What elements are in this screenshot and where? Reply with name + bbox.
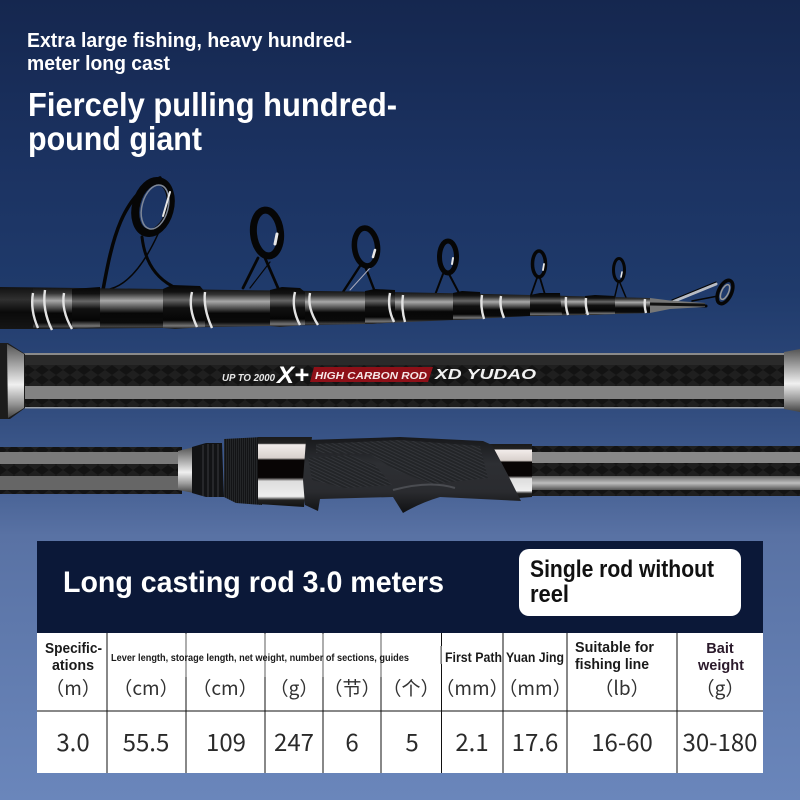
table units: （cm）: [113, 674, 179, 701]
guide rings and frames: [103, 177, 736, 306]
left blank: [0, 447, 182, 494]
panel title: Long casting rod 3.0 meters: [63, 566, 444, 599]
knurled ring: [224, 437, 262, 505]
table units: （个）: [382, 674, 440, 701]
table headers: [45, 640, 744, 674]
title: headline: Fiercely pulling hundred-: [28, 86, 397, 123]
table values: 6: [345, 723, 359, 758]
note badge: [519, 549, 741, 616]
table headers: Bait: [706, 641, 734, 657]
table units: （lb）: [594, 674, 650, 701]
chrome reel seat: [258, 437, 312, 507]
table values: 55.5: [123, 723, 169, 758]
table values: 30-180: [683, 723, 757, 758]
silver ferrule: [178, 447, 194, 493]
rod sections: [0, 287, 33, 329]
logo: X mark: X+: [275, 362, 309, 389]
table units: （g）: [270, 674, 318, 701]
table values: 5: [405, 723, 419, 758]
title: subtitle: [27, 30, 352, 75]
logo text: up to 2000: UP TO 2000: [222, 373, 275, 384]
table values: [56, 723, 757, 758]
handle grip: [303, 437, 521, 513]
logo: XD YUDAO: XD YUDAO: [434, 366, 536, 383]
table units: （m）: [45, 674, 101, 701]
table units: （节）: [323, 674, 381, 701]
table units: （cm）: [192, 674, 258, 701]
title: headline: pound giant: [28, 120, 202, 157]
rod silver rings: [32, 290, 646, 330]
threaded nut: [192, 443, 224, 497]
lower rod with reel seat and handle: [0, 437, 800, 513]
title: subtitle: meter long cast: [27, 53, 170, 75]
telescopic rod with guides: [0, 177, 736, 330]
table units: （mm）: [435, 674, 509, 701]
rod dark collars and thread wraps: [72, 285, 615, 329]
note badge: reel: [530, 581, 569, 608]
right blank: [528, 446, 800, 496]
table headers: Suitable for: [575, 640, 654, 656]
table headers: ations: [52, 658, 94, 674]
ring highlights: [163, 192, 622, 277]
title: subtitle: Extra large fishing, heavy hundred-: [27, 30, 352, 52]
logo: red label: [310, 367, 433, 382]
table values: 109: [206, 723, 246, 758]
table values: 247: [274, 723, 314, 758]
table headers: First Path: [445, 650, 502, 665]
table values: 2.1: [455, 723, 489, 758]
middle rod section with logo: [0, 343, 800, 419]
spec table: [37, 633, 763, 773]
left ferrule: [0, 343, 25, 419]
table values: 17.6: [512, 723, 558, 758]
spec panel header: [37, 541, 763, 633]
table values: 3.0: [56, 723, 90, 758]
table units: （g）: [696, 674, 744, 701]
table units: （mm）: [498, 674, 572, 701]
logo: high carbon rod: HIGH CARBON ROD: [315, 370, 427, 382]
table headers: Lever length, storage length, net weight, number of sections, guides: [111, 652, 409, 664]
table values: 16-60: [591, 723, 653, 758]
note badge: Single rod without: [530, 556, 714, 583]
table headers: weight: [697, 658, 744, 674]
table headers: Specific-: [45, 641, 102, 657]
table headers: fishing line: [575, 657, 649, 673]
right ferrule: [784, 349, 800, 412]
table headers: Yuan Jing: [506, 650, 564, 665]
title: headline: [28, 86, 397, 157]
silver collar behind handle: [490, 444, 532, 499]
table units: [45, 674, 744, 701]
